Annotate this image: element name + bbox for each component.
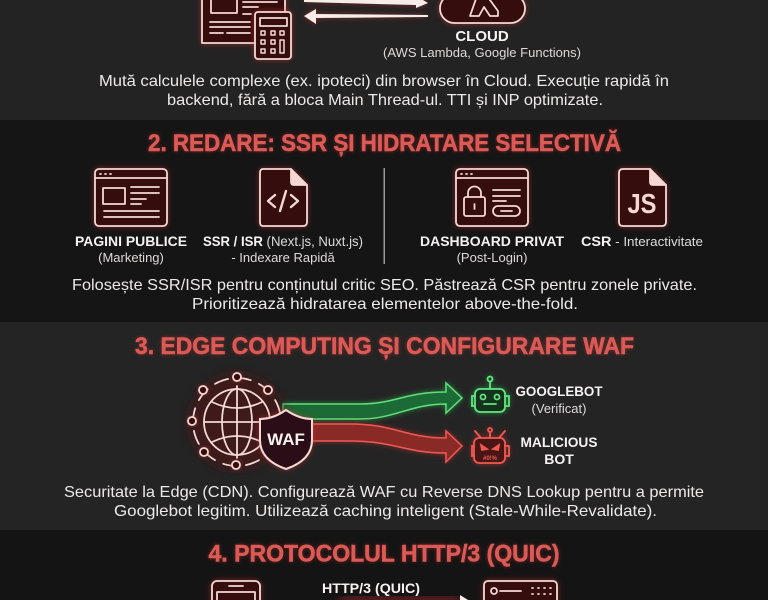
label: googlebot: GOOGLEBOT <box>516 383 603 399</box>
label: cloud: CLOUD <box>455 28 509 45</box>
label: private dashboard: DASHBOARD PRIVAT <box>420 233 564 249</box>
panel: section 1 cloud offloading <box>0 0 768 120</box>
label: private dashboard: (Post-Login) <box>457 250 527 265</box>
heading: section 3: 3. EDGE COMPUTING ȘI CONFIGURARE WAF <box>135 333 634 360</box>
icon: server <box>484 581 557 600</box>
label: ssr isr: - Indexare Rapidă <box>231 250 335 265</box>
label: public pages: (Marketing) <box>98 250 164 265</box>
text: section 3 description <box>64 484 704 520</box>
text: section 1 description: Mută calculele complexe (ex. ipoteci) din browser în Cloud. Execuție rapidă în <box>99 73 669 90</box>
icon: WAF shield: WAF <box>267 430 305 449</box>
arrow: red blocked traffic <box>305 424 462 462</box>
text: section 1 description: backend, fără a bloca Main Thread-ul. TTI și INP optimizate. <box>167 92 603 109</box>
icon: malicious bot: #0!% <box>483 456 498 462</box>
icon: code document <box>260 169 307 226</box>
text: section 1 description <box>99 73 669 109</box>
label: public pages <box>75 233 187 265</box>
label: malicious bot: BOT <box>544 451 574 467</box>
label: cloud providers: (AWS Lambda, Google Functions) <box>383 45 581 60</box>
panel: section 4 HTTP/3 <box>0 530 768 600</box>
icon: document with calculator <box>202 0 291 59</box>
divider <box>384 168 385 264</box>
icon: globe network <box>188 373 285 470</box>
label: csr: CSR - Interactivitate <box>581 233 703 249</box>
arrow: from cloud <box>304 9 428 24</box>
label: malicious bot <box>520 434 598 467</box>
heading: section 4: 4. PROTOCOLUL HTTP/3 (QUIC) <box>208 540 560 568</box>
icon: javascript document: JS <box>628 188 656 219</box>
icon: WAF shield <box>260 410 312 469</box>
label: public pages: PAGINI PUBLICE <box>75 233 187 249</box>
text: section 2 description: Prioritizează hidratarea elementelor above-the-fold. <box>192 296 578 313</box>
icon: cloud with lambda <box>440 0 525 23</box>
text: section 3 description: Googlebot legitim. Utilizează caching inteligent (Stale-While-Revalidate). <box>114 503 657 520</box>
panel: section 2 rendering <box>0 120 768 322</box>
panel: section 3 edge and WAF <box>0 322 768 530</box>
text: section 3 description: Securitate la Edge (CDN). Configurează WAF cu Reverse DNS Lookup pentru a permite <box>64 484 704 501</box>
label: private dashboard <box>420 233 564 265</box>
icon: locked dashboard browser <box>456 169 528 226</box>
icon: phone <box>212 581 260 600</box>
arrow: green allowed traffic <box>283 383 462 419</box>
label: ssr isr: SSR / ISR (Next.js, Nuxt.js) <box>203 233 363 249</box>
heading: section 2: 2. REDARE: SSR ȘI HIDRATARE SELECTIVĂ <box>148 129 621 157</box>
icon: public page browser <box>95 169 167 226</box>
label: googlebot <box>516 383 603 416</box>
label: ssr isr <box>203 233 363 265</box>
text: section 2 description: Folosește SSR/ISR pentru conținutul critic SEO. Păstrează CSR pentru zonele private. <box>72 277 697 294</box>
icon: googlebot robot <box>472 376 509 412</box>
icon: malicious bot <box>472 428 509 463</box>
arrow: to cloud <box>304 0 428 8</box>
label: HTTP/3 QUIC: HTTP/3 (QUIC) <box>322 580 420 596</box>
icon: javascript document <box>619 169 666 226</box>
label: googlebot: (Verificat) <box>532 401 586 416</box>
arrow: fast connection <box>340 595 473 600</box>
label: malicious bot: MALICIOUS <box>520 434 598 450</box>
text: section 2 description <box>72 277 697 313</box>
